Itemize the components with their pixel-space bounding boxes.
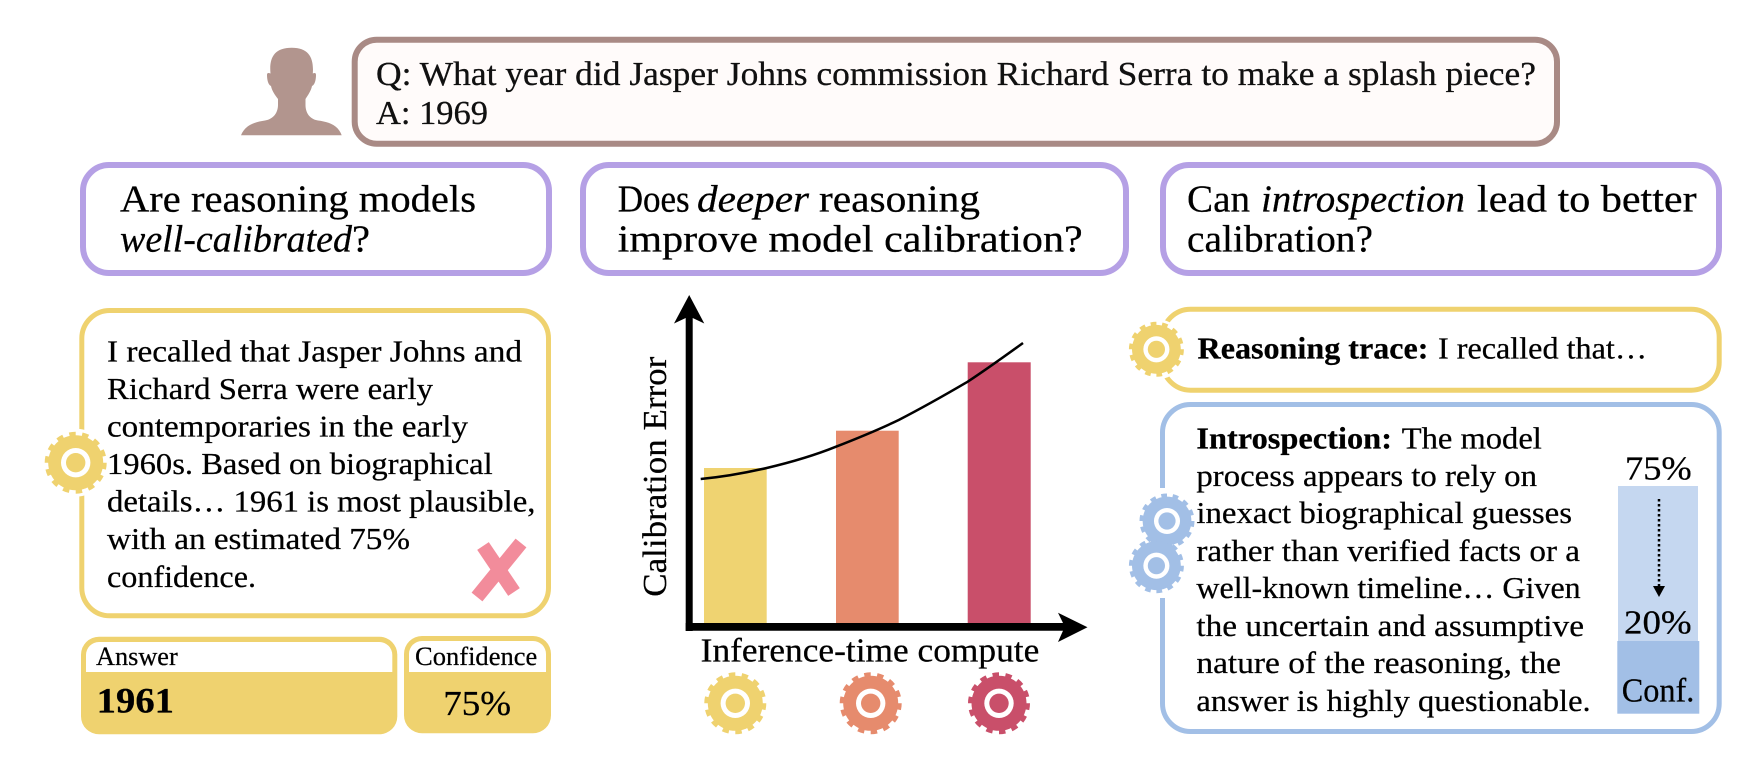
introspection text: rather than verified facts or a	[1196, 533, 1580, 568]
panel: heading introspection	[1163, 165, 1719, 273]
y axis label: Calibration Error	[637, 356, 674, 597]
panel: confidence	[404, 636, 551, 733]
reasoning trace text: I recalled that…	[1438, 330, 1647, 365]
trend curve	[701, 343, 1023, 479]
introspection text: The model	[1402, 420, 1542, 455]
panel: reasoning trace summary	[1126, 309, 1719, 390]
answer text: A: 1969	[376, 95, 488, 132]
introspection text	[1196, 420, 1591, 718]
panel: confidence: Confidence	[415, 642, 537, 671]
reasoning text: contemporaries in the early	[107, 409, 469, 444]
panel: answer: Answer	[96, 642, 178, 671]
reasoning text	[107, 334, 536, 594]
bar: low compute	[704, 468, 767, 623]
panel: heading introspection: calibration?	[1187, 219, 1373, 261]
panel: answer	[81, 637, 397, 734]
icon: lower blue gear	[1131, 540, 1182, 591]
icon: orange compute gear	[842, 675, 899, 732]
icon: red compute gear	[970, 675, 1028, 732]
panel: answer: 1961	[97, 680, 174, 720]
label: confidence: Conf.	[1622, 673, 1694, 710]
icon: wrong mark	[477, 543, 521, 597]
panel: heading introspection: Can	[1187, 179, 1250, 221]
icon: yellow gear	[1126, 319, 1187, 379]
icon: yellow gear	[42, 429, 110, 497]
x axis label: Inference-time compute	[701, 633, 1039, 670]
reasoning trace label: Reasoning trace:	[1198, 330, 1428, 365]
panel: question and answer	[355, 40, 1557, 144]
panel: heading well-calibrated: ?	[352, 219, 370, 261]
panel: heading deeper reasoning: improve model calibration?	[618, 219, 1083, 261]
introspection text: answer is highly questionable.	[1196, 683, 1591, 718]
bar chart: calibration error	[637, 295, 1088, 670]
panel: heading introspection: introspection	[1261, 179, 1465, 221]
introspection text: inexact biographical guesses	[1196, 495, 1572, 530]
introspection text: Introspection:	[1196, 420, 1392, 455]
reasoning text: confidence.	[107, 559, 256, 594]
question text: Q: What year did Jasper Johns commission Richard Serra to make a splash piece?	[376, 56, 1536, 93]
reasoning text: Richard Serra were early	[107, 371, 434, 406]
y axis arrow	[674, 295, 704, 631]
panel: heading introspection: lead to better	[1477, 179, 1697, 221]
panel: heading well-calibrated: Are reasoning models	[120, 179, 476, 221]
panel: heading deeper reasoning: reasoning	[819, 179, 980, 221]
panel: introspection	[1131, 404, 1719, 732]
reasoning text: 1960s. Based on biographical	[107, 446, 493, 481]
icon: upper blue gear	[1142, 496, 1192, 546]
bar: medium compute	[836, 431, 899, 623]
panel: heading deeper reasoning: deeper	[697, 179, 809, 221]
label: revised confidence: 20%	[1624, 604, 1692, 641]
icon: yellow compute gear	[707, 675, 764, 732]
introspection text: process appears to rely on	[1196, 458, 1538, 493]
x axis arrow	[686, 613, 1088, 642]
panel: reasoning trace	[42, 310, 548, 616]
icon: user silhouette	[241, 48, 342, 135]
arrow: confidence drop	[1653, 499, 1665, 597]
introspection text: well-known timeline… Given	[1196, 570, 1581, 605]
reasoning text: I recalled that Jasper Johns and	[107, 334, 523, 369]
panel: heading deeper reasoning	[583, 165, 1126, 273]
label: initial confidence: 75%	[1625, 450, 1692, 487]
reasoning text: with an estimated 75%	[107, 521, 410, 556]
introspection text: the uncertain and assumptive	[1196, 608, 1584, 643]
introspection text: nature of the reasoning, the	[1196, 645, 1561, 680]
confidence bar	[1617, 450, 1699, 714]
panel: confidence: 75%	[443, 684, 511, 723]
panel: heading deeper reasoning: Does	[618, 179, 690, 221]
bar: high compute	[968, 362, 1031, 623]
panel: heading well-calibrated: well-calibrated	[120, 219, 353, 261]
reasoning text: details… 1961 is most plausible,	[107, 484, 536, 519]
panel: heading well-calibrated	[83, 165, 549, 273]
